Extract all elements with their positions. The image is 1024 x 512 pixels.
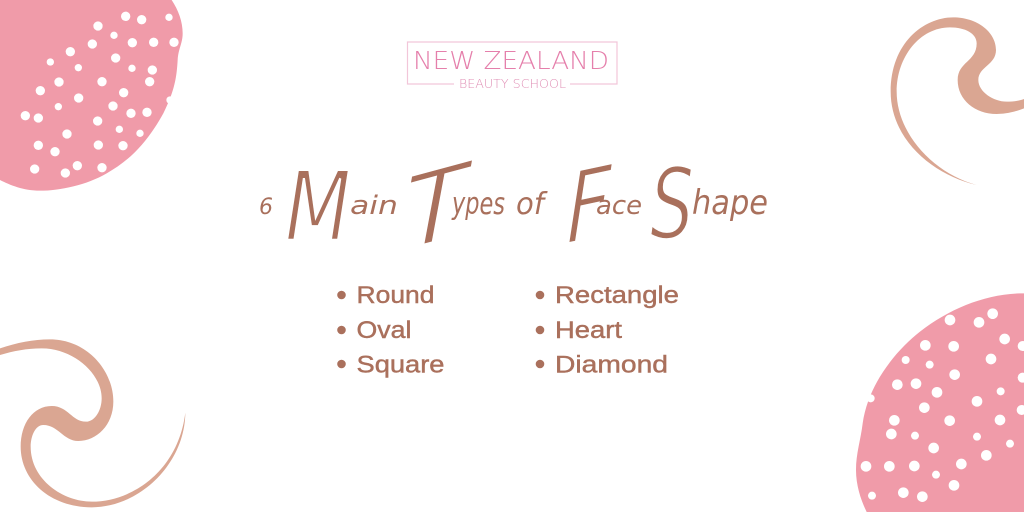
title: 6 Main Types of Face Shape: F: [566, 144, 614, 268]
title: 6 Main Types of Face Shape: ain: [350, 191, 398, 221]
list: left column: [337, 282, 444, 378]
title: 6 Main Types of Face Shape: ace: [596, 191, 642, 221]
blob: top-left pink with white dots: [0, 0, 183, 191]
blob: bottom-right pink with white dots: [856, 293, 1024, 512]
logo: New Zealand Beauty School: [408, 42, 617, 92]
list: left column: Square: [356, 352, 444, 378]
logo: New Zealand Beauty School: NEW ZEALAND: [413, 46, 609, 75]
list: right column: [536, 282, 679, 378]
title: 6 Main Types of Face Shape: of: [516, 187, 548, 222]
title: 6 Main Types of Face Shape: ypes: [451, 187, 505, 222]
list: right column: Diamond: [555, 352, 668, 378]
swirl: top-right tan: [891, 17, 1024, 185]
title: 6 Main Types of Face Shape: [259, 140, 768, 275]
list: left column: Oval: [356, 317, 412, 344]
title: 6 Main Types of Face Shape: S: [650, 148, 694, 262]
title: 6 Main Types of Face Shape: hape: [692, 183, 768, 223]
swirl: bottom-left tan: [0, 339, 185, 507]
title: 6 Main Types of Face Shape: M: [285, 151, 351, 263]
list: right column: Rectangle: [555, 282, 679, 309]
list: right column: Heart: [555, 317, 622, 344]
logo: New Zealand Beauty School: BEAUTY SCHOOL: [459, 77, 566, 92]
list: left column: Round: [356, 282, 434, 309]
title: 6 Main Types of Face Shape: T: [405, 140, 474, 275]
title: 6 Main Types of Face Shape: 6: [259, 195, 273, 220]
